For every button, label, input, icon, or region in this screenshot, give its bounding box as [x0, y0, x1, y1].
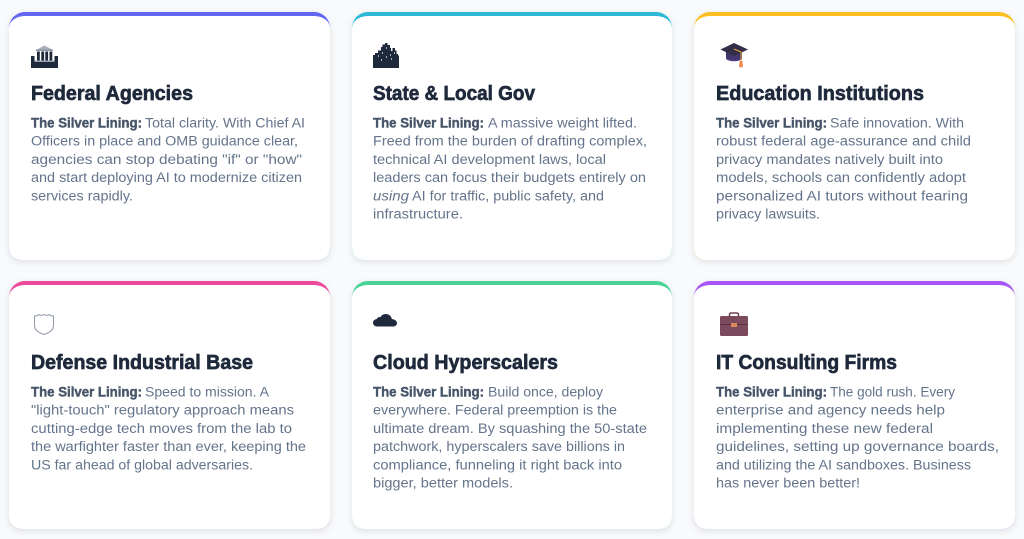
panel: Cloud Hyperscalers [352, 281, 672, 529]
text block: The gold rush. Every [830, 384, 955, 400]
text block: bigger, better models. [373, 476, 513, 490]
text block [716, 384, 999, 490]
text block [373, 384, 647, 490]
text block [716, 116, 971, 222]
panel: State and Local Gov [352, 12, 672, 260]
heading: Defense Industrial Base [31, 352, 253, 374]
text block: The Silver Lining: [31, 116, 142, 130]
panel: Federal Agencies [9, 12, 330, 260]
text block: Build once, deploy [488, 384, 603, 400]
text block: agencies can stop debating "if" or "how" [31, 152, 302, 167]
text block [31, 384, 306, 472]
text block: privacy lawsuits. [716, 206, 820, 222]
heading: State & Local Gov [373, 83, 536, 105]
text block [373, 116, 647, 222]
panel: IT Consulting Firms [694, 281, 1015, 529]
text block: Speed to mission. A [145, 384, 269, 400]
heading: IT Consulting Firms [716, 352, 897, 374]
text block: ultimate dream. By squashing the 50-state [373, 421, 647, 436]
icon: shield [34, 314, 54, 334]
text block: leaders can focus their budgets entirely on [373, 170, 646, 185]
icon: briefcase [720, 313, 748, 336]
panel: Defense Industrial Base [9, 281, 330, 529]
text block: has never been better! [716, 476, 860, 490]
text block [31, 116, 305, 203]
text block: using [373, 188, 410, 203]
heading: Cloud Hyperscalers [373, 352, 558, 374]
text block: compliance, funneling it right back into [373, 457, 622, 472]
text block: enterprise and agency needs help [716, 403, 945, 418]
text block: The Silver Lining: [373, 384, 484, 400]
text block: Total clarity. With Chief AI [145, 116, 305, 130]
text block: models, schools can confidently adopt [716, 170, 966, 185]
icon: graduation cap [720, 43, 748, 67]
text block: guidelines, setting up governance boards, [716, 439, 999, 454]
text block: everywhere. Federal preemption is the [373, 403, 617, 418]
text block: Officers in place and OMB guidance clear, [31, 134, 298, 149]
text block: US far ahead of global adversaries. [31, 457, 253, 472]
text block: The Silver Lining: [31, 384, 142, 400]
text block: personalized AI tutors without fearing [716, 188, 968, 203]
panel: Education Institutions [694, 12, 1015, 260]
text block: The Silver Lining: [716, 116, 827, 130]
text block: infrastructure. [373, 206, 463, 222]
text block: Safe innovation. With [830, 116, 964, 130]
text block: "light-touch" regulatory approach means [31, 403, 294, 418]
heading: Education Institutions [716, 83, 924, 105]
icon: government building [31, 46, 58, 68]
text block: robust federal age-assurance and child [716, 134, 971, 149]
text block: privacy mandates natively built into [716, 152, 943, 167]
text block: the warfighter faster than ever, keeping the [31, 439, 306, 454]
heading: Federal Agencies [31, 83, 193, 105]
text block: The Silver Lining: [716, 384, 827, 400]
icon: cloud [373, 314, 397, 326]
icon: city skyline [373, 43, 399, 68]
text block: services rapidly. [31, 188, 133, 203]
text block: implementing these new federal [716, 421, 933, 436]
text block: technical AI development laws, local [373, 152, 606, 167]
text block: AI for traffic, public safety, and [412, 188, 604, 203]
text block: The Silver Lining: [373, 116, 484, 130]
text block: patchwork, hyperscalers save billions in [373, 439, 625, 454]
text block: A massive weight lifted. [488, 116, 637, 130]
text block: Freed from the burden of drafting complex, [373, 134, 647, 149]
text block: and start deploying AI to modernize citizen [31, 170, 302, 185]
text block: cutting-edge tech moves from the lab to [31, 421, 292, 436]
text block: and utilizing the AI sandboxes. Business [716, 457, 971, 472]
